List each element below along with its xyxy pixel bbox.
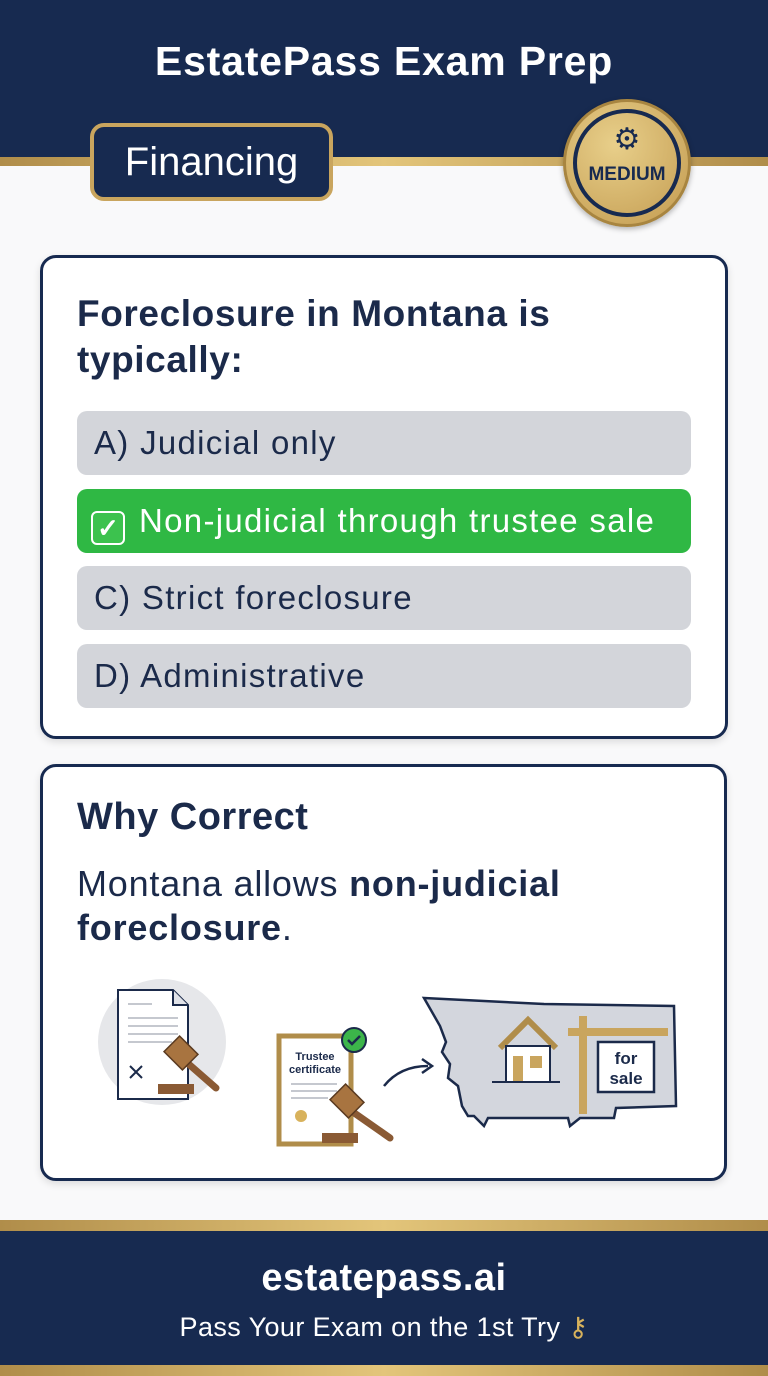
arrow: [384, 1059, 432, 1086]
title: EstatePass Exam Prep: [155, 38, 613, 84]
header gold line: [0, 157, 768, 166]
icon: gear: ⚙: [614, 123, 640, 156]
footer site name: estatepass.ai: [261, 1257, 507, 1299]
panel: question: [40, 255, 728, 739]
difficulty badge: Medium: [563, 99, 691, 227]
option C: C) Strict foreclosure: [94, 579, 413, 616]
category badge: Financing: Financing: [125, 140, 298, 184]
icon: Montana map with house and for-sale sign: [424, 998, 676, 1126]
option B correct: ✓: [97, 513, 119, 543]
option C: [77, 566, 691, 630]
icon: trustee certificate: Trustee: [295, 1051, 335, 1063]
option D: [77, 644, 691, 708]
icon: trustee certificate: [279, 1028, 390, 1144]
explanation text: Montana allows non-judicial foreclosure.: [77, 863, 561, 948]
footer: [0, 1220, 768, 1376]
footer tagline with key icon: Pass Your Exam on the 1st Try ⚷: [180, 1312, 588, 1342]
difficulty badge: Medium: MEDIUM: [588, 164, 666, 185]
header band: [0, 0, 768, 158]
icon: trustee certificate: certificate: [289, 1064, 341, 1076]
icon: Montana map with house and for-sale sign: for: [615, 1049, 638, 1068]
option D: D) Administrative: [94, 657, 366, 694]
why correct heading: Why Correct: [77, 796, 308, 838]
option B correct: [77, 489, 691, 553]
option B correct: Non-judicial through trustee sale: [139, 502, 655, 539]
icon: document with gavel: [98, 979, 226, 1105]
option A: A) Judicial only: [94, 424, 337, 461]
illustration: [98, 979, 678, 1146]
question heading: Foreclosure in Montana is typically:: [77, 293, 550, 380]
category badge: Financing: [90, 123, 333, 201]
option A: [77, 411, 691, 475]
panel: why correct: [40, 764, 727, 1181]
icon: Montana map with house and for-sale sign: sale: [609, 1069, 643, 1088]
